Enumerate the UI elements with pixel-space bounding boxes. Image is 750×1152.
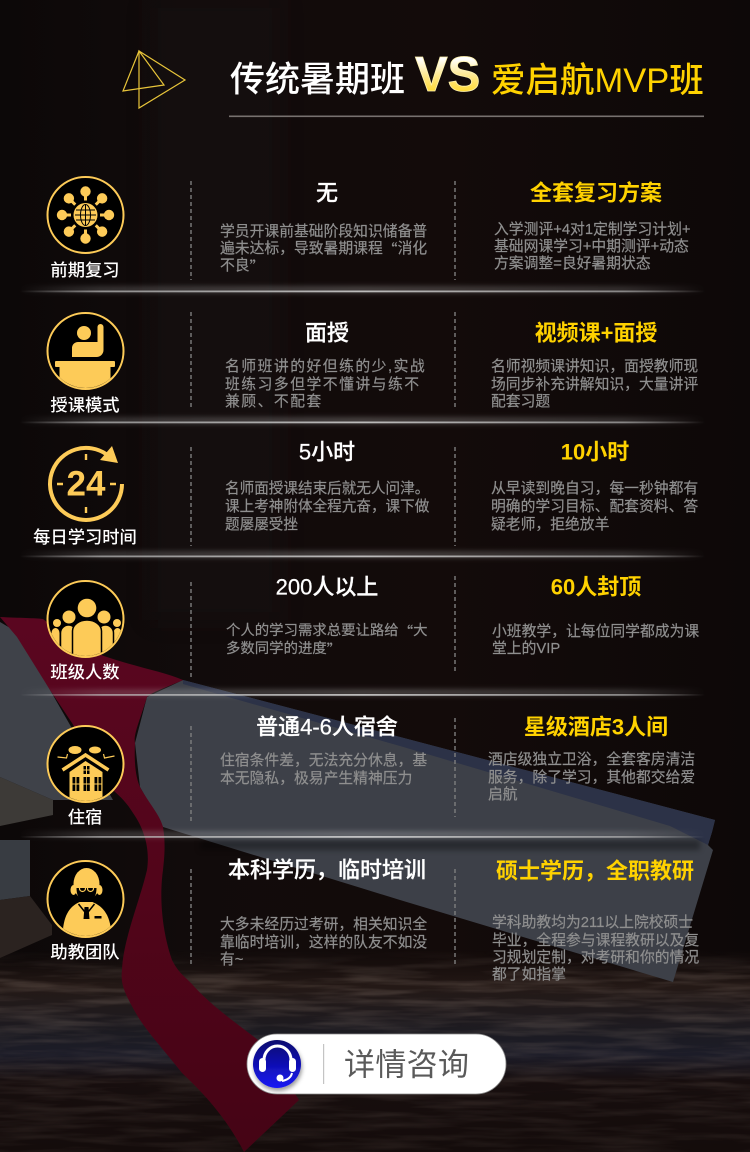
label: 授课模式	[50, 395, 120, 415]
MVP text: 都了如指掌	[492, 966, 566, 983]
MVP text: 方案调整=良好暑期状态	[494, 254, 651, 272]
traditional text: 住宿条件差，无法充分休息，基	[220, 752, 427, 769]
dashed separators	[191, 869, 455, 967]
MVP text: 服务，除了学习，其他都交给爱	[488, 768, 695, 786]
traditional text: 课上考神附体全程亢奋，课下做	[225, 497, 430, 515]
MVP text: 启航	[488, 786, 518, 803]
label: 助教团队	[50, 942, 120, 962]
MVP heading: 10小时	[561, 440, 629, 464]
MVP text: 堂上的VIP	[492, 640, 560, 657]
traditional heading: 5小时	[299, 440, 355, 464]
MVP heading: 全套复习方案	[530, 180, 662, 206]
traditional text	[226, 620, 428, 660]
icon: headset	[253, 1040, 301, 1088]
MVP heading: 60人封顶	[551, 574, 641, 600]
traditional heading: 无	[316, 180, 338, 206]
traditional text: 遍未达标，导致暑期课程“消化	[220, 238, 427, 260]
MVP text: 疑老师，拒绝放羊	[491, 516, 610, 533]
dashed separators	[191, 576, 455, 680]
label: 前期复习	[50, 260, 120, 280]
MVP text: 场同步补充讲解知识，大量讲评	[491, 376, 698, 393]
MVP text	[491, 358, 698, 410]
traditional heading: 200人以上	[276, 574, 378, 600]
label: 班级人数	[50, 662, 120, 682]
dashed separators	[191, 718, 455, 824]
MVP text	[492, 913, 699, 983]
traditional text	[220, 752, 427, 787]
traditional heading: 普通4-6人宿舍	[256, 714, 398, 740]
logo: triangles	[123, 51, 185, 108]
MVP heading: 硕士学历，全职教研	[496, 858, 694, 884]
traditional text: 名师班讲的好但练的少,实战	[225, 358, 426, 375]
row dividers	[20, 287, 705, 838]
MVP text	[492, 623, 699, 657]
traditional text: 个人的学习需求总要让路给“大	[226, 620, 428, 642]
traditional text: 有~	[220, 951, 243, 968]
MVP text: 从早读到晚自习，每一秒钟都有	[491, 480, 698, 497]
MVP text: 小班教学，让每位同学都成为课	[492, 623, 699, 640]
traditional text	[220, 223, 427, 276]
traditional text	[225, 480, 430, 533]
dashed separators	[191, 447, 455, 546]
traditional heading: 本科学历，临时培训	[228, 858, 426, 882]
traditional text: 兼顾、不配套	[225, 393, 323, 410]
icon: group of people	[48, 581, 124, 661]
MVP text	[494, 221, 691, 272]
traditional text: 多数同学的进度”	[226, 638, 341, 660]
label: 每日学习时间	[33, 527, 137, 547]
traditional text: 题屡屡受挫	[225, 516, 298, 533]
traditional text: 名师面授课结束后就无人问津。	[225, 480, 429, 497]
row: 每日学习时间	[33, 440, 698, 547]
icon: assistant with glasses	[48, 861, 124, 939]
icon: 24 hour clock	[50, 446, 122, 520]
label: 住宿	[68, 807, 102, 827]
MVP text	[488, 750, 695, 803]
traditional text: 靠临时培训，这样的队友不如没	[220, 934, 427, 951]
row: 前期复习	[48, 177, 691, 280]
traditional text: 本无隐私，极易产生精神压力	[220, 770, 412, 787]
red ribbon	[0, 617, 299, 1152]
title	[230, 48, 704, 102]
MVP text: 配套习题	[491, 393, 550, 410]
row: 助教团队	[48, 858, 699, 983]
MVP heading: 星级酒店3人间	[524, 714, 668, 740]
title: VS	[415, 48, 480, 102]
MVP heading: 视频课+面授	[535, 320, 657, 346]
icon: 24 hour clock: 24	[67, 464, 106, 504]
icon: globe network	[48, 177, 124, 253]
traditional text	[225, 358, 426, 410]
MVP text: 毕业，全程参与课程教研以及复	[492, 931, 699, 949]
MVP text: 酒店级独立卫浴，全套客房清洁	[488, 750, 695, 768]
icon: house with hearts	[48, 726, 124, 804]
consult button: 详情咨询	[344, 1048, 469, 1082]
row: 班级人数	[48, 574, 699, 682]
title rule	[229, 116, 704, 117]
row: 授课模式	[48, 312, 698, 415]
traditional heading: 面授	[305, 320, 349, 346]
dashed separators	[191, 312, 455, 410]
books on the left	[0, 777, 53, 958]
traditional text	[220, 915, 427, 968]
icon: teacher at desk	[48, 313, 124, 393]
MVP text: 习规划定制，对考研和你的情况	[492, 949, 699, 966]
MVP text: 名师视频课讲知识，面授教师现	[491, 358, 698, 375]
traditional text: 大多未经历过考研，相关知识全	[220, 915, 427, 933]
traditional text: 班练习多但学不懂讲与练不	[225, 376, 421, 393]
traditional text: 不良”	[220, 256, 264, 276]
scroll	[0, 622, 715, 982]
consult button	[247, 1034, 506, 1094]
background	[0, 953, 750, 1152]
title: 传统暑期班	[230, 60, 405, 100]
MVP text: 明确的学习目标、配套资料、答	[491, 498, 698, 515]
MVP text: 学科助教均为211以上院校硕士	[492, 913, 693, 931]
MVP text: 基础网课学习+中期测评+动态	[494, 238, 689, 255]
dashed separators	[191, 181, 455, 280]
row: 住宿	[48, 714, 695, 827]
MVP text: 入学测评+4对1定制学习计划+	[494, 221, 691, 238]
traditional text: 学员开课前基础阶段知识储备普	[220, 223, 427, 240]
title: 爱启航MVP班	[491, 62, 704, 100]
MVP text	[491, 480, 698, 533]
